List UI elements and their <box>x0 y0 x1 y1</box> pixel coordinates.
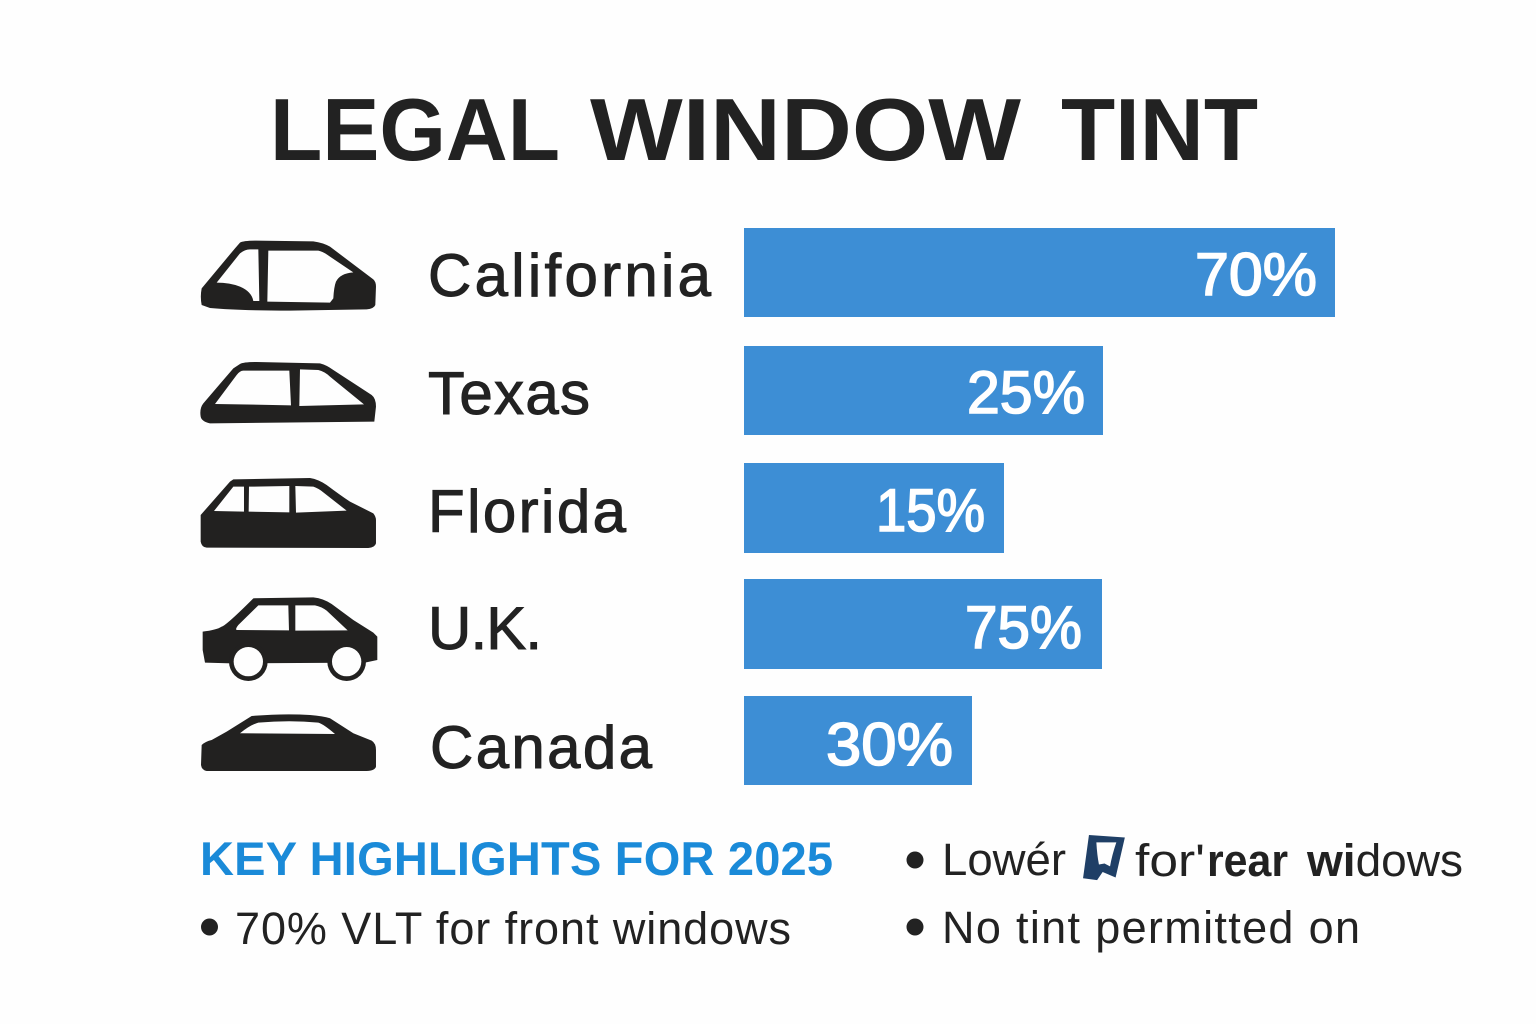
highlight: rear windows <box>906 834 1463 886</box>
Texas label: Texas <box>428 360 590 427</box>
icon: U.K. car <box>203 597 377 681</box>
icon: California car <box>201 241 376 311</box>
Canada value: 30% <box>826 711 953 778</box>
title: TINT <box>1061 80 1258 179</box>
Texas value: 25% <box>967 359 1085 426</box>
highlight: rear windows: for' <box>1135 835 1205 886</box>
California bar <box>744 228 1335 317</box>
highlight: rear windows: widows <box>1306 835 1463 886</box>
Florida label: Florida <box>428 478 627 545</box>
California label: California <box>428 242 712 309</box>
U.K. bar <box>744 579 1102 669</box>
icon: Florida car <box>201 478 376 548</box>
Canada bar <box>744 696 972 785</box>
title: LEGAL <box>270 80 560 179</box>
title <box>270 80 1258 179</box>
highlight: rear windows: rear <box>1207 835 1288 886</box>
Texas bar <box>744 346 1103 435</box>
Florida bar <box>744 463 1004 553</box>
California value: 70% <box>1195 241 1317 308</box>
U.K. value: 75% <box>965 594 1082 661</box>
title: WINDOW <box>590 80 1021 179</box>
highlight: front windows: 70% VLT for front windows <box>235 903 791 954</box>
highlight: no tint: No tint permitted on <box>942 902 1360 953</box>
icon: Canada car <box>201 714 376 771</box>
icon: glitched blue badge <box>1083 835 1125 880</box>
Canada label: Canada <box>430 714 653 781</box>
highlights heading: KEY HIGHLIGHTS FOR 2025 <box>200 832 833 885</box>
U.K. label: U.K. <box>428 595 542 662</box>
highlight: rear windows: Lowér <box>942 834 1066 885</box>
Florida value: 15% <box>876 477 985 544</box>
icon: Texas car <box>200 362 376 423</box>
